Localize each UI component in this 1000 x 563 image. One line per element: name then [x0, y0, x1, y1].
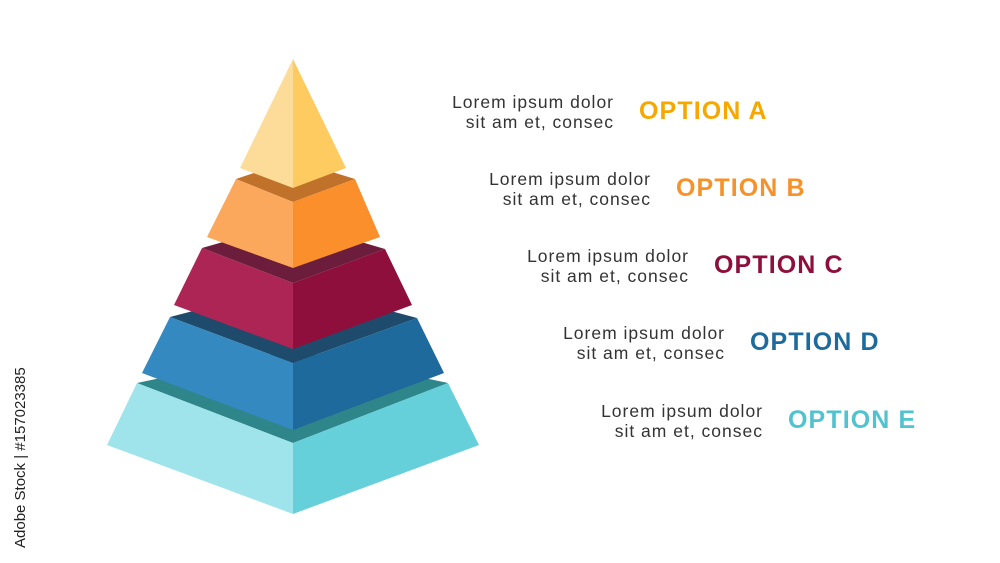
option A: OPTION A	[639, 97, 768, 125]
tier D	[142, 285, 444, 430]
option D	[563, 323, 880, 363]
option C: Lorem ipsum dolor	[527, 246, 689, 266]
option A: sit am et, consec	[466, 112, 614, 132]
tier B	[207, 160, 380, 268]
option E: sit am et, consec	[615, 421, 763, 441]
tier A	[240, 59, 346, 188]
option B: Lorem ipsum dolor	[489, 169, 651, 189]
option D: Lorem ipsum dolor	[563, 323, 725, 343]
tier E	[107, 350, 479, 514]
option E: Lorem ipsum dolor	[601, 401, 763, 421]
option C	[527, 246, 844, 286]
tier C	[174, 222, 412, 349]
option E: OPTION E	[788, 406, 916, 434]
option C: sit am et, consec	[541, 266, 689, 286]
option B	[489, 169, 806, 209]
option E	[601, 401, 916, 441]
option B: sit am et, consec	[503, 189, 651, 209]
option C: OPTION C	[714, 251, 844, 279]
option B: OPTION B	[676, 174, 806, 202]
option A: Lorem ipsum dolor	[452, 92, 614, 112]
option A	[452, 92, 768, 132]
option D: sit am et, consec	[577, 343, 725, 363]
watermark id: Adobe Stock | #157023385	[12, 367, 29, 548]
option D: OPTION D	[750, 328, 880, 356]
